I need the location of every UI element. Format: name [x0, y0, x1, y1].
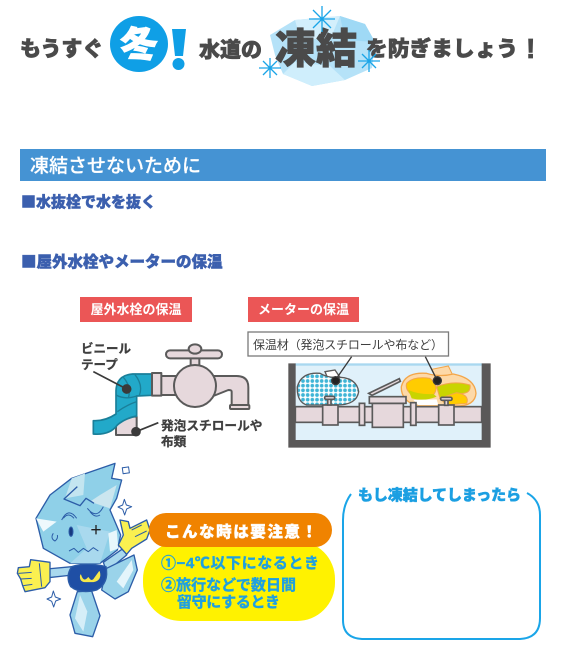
orange header — [149, 513, 332, 547]
callout dots and leaders — [93, 372, 158, 436]
callout: 保温材: 保温材（発泡スチロールや布など） — [253, 338, 443, 352]
meter pit — [288, 363, 491, 448]
yellow panel — [143, 541, 335, 621]
leg — [70, 591, 100, 637]
title text: 水道の: 水道の — [199, 39, 262, 62]
label: メーターの保温 — [248, 297, 359, 322]
gloves — [17, 520, 150, 592]
frame outline — [343, 493, 540, 639]
icon: ice block behind title — [270, 16, 375, 86]
body shorts — [68, 564, 107, 592]
title text: exclamation: ! — [526, 33, 535, 64]
callout text: ビニールテープ: テープ — [81, 358, 118, 372]
sparkles — [47, 467, 132, 607]
label: 屋外水栓の保温: 屋外水栓の保温 — [90, 302, 182, 317]
icon: winter badge: 冬 — [118, 23, 161, 69]
panel: faucet insulation — [80, 297, 262, 449]
panel: if frozen — [343, 486, 540, 639]
label: 屋外水栓の保温 — [80, 297, 192, 322]
callout: caution blob — [143, 513, 335, 621]
section heading band: 凍結させないために — [30, 155, 201, 177]
title text: もうすぐ: もうすぐ — [20, 38, 103, 61]
illustration: faucet — [93, 344, 249, 436]
right bag: cloth — [401, 366, 476, 406]
face — [52, 507, 103, 552]
orange header: こんな時は要注意！ — [165, 522, 317, 541]
illustration: meter box — [288, 357, 491, 448]
title — [20, 6, 535, 86]
mascot: ice character — [17, 463, 150, 637]
caution list: 留守にするとき — [177, 593, 280, 611]
head — [36, 463, 122, 563]
pipe and meter — [295, 379, 482, 427]
caution list: ②旅行などで数日間 — [161, 576, 296, 594]
caution list: ①−4℃以下になるとき — [161, 555, 319, 572]
callout text: ビニールテープ: ビニール — [81, 341, 132, 356]
title text: 凍結: 凍結 — [275, 26, 357, 72]
subheading: 水抜栓: ■水抜栓で水を抜く — [21, 191, 156, 212]
icon: sparkles — [259, 6, 380, 78]
icon: winter badge — [110, 16, 168, 72]
section heading band — [20, 149, 546, 181]
left bag: beads — [297, 370, 359, 405]
label: メーターの保温: メーターの保温 — [258, 302, 349, 317]
subheading: 屋外水栓: ■屋外水栓やメーターの保温 — [21, 250, 223, 272]
callout text: 発泡スチロールや布類: 発泡スチロールや — [161, 418, 262, 433]
callout text: 発泡スチロールや布類: 布類 — [161, 434, 187, 449]
panel: meter insulation — [248, 297, 491, 448]
right crystal — [102, 555, 137, 599]
exclamation mark — [172, 29, 186, 70]
callout: 保温材 — [248, 332, 448, 356]
title text: を防ぎましょう: を防ぎましょう — [366, 37, 518, 61]
leader dots — [332, 357, 441, 385]
arms — [47, 548, 127, 578]
frame heading: もし凍結してしまったら — [358, 486, 521, 504]
